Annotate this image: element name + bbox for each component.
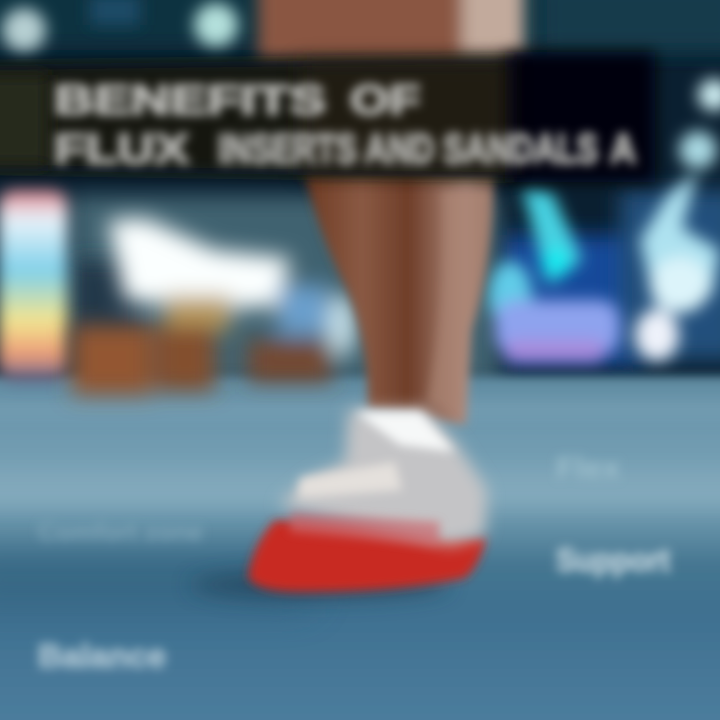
sandal	[248, 408, 487, 592]
floor label: lower left: Balance	[38, 638, 166, 674]
sandal shadow	[190, 571, 450, 599]
upper leg	[258, 0, 524, 60]
title band	[0, 52, 655, 182]
left rainbow panel	[0, 190, 68, 382]
lower leg	[305, 175, 494, 425]
title: benefits text: OF	[350, 76, 420, 123]
floor label: left: Comfort zone	[38, 516, 203, 546]
title: benefits text: FLUX	[54, 125, 189, 172]
background shapes: white blurred object	[72, 218, 357, 395]
title: benefits text: BENEFITS	[54, 76, 326, 123]
title: benefits text	[54, 76, 636, 172]
background shapes: blue neon right	[488, 170, 720, 362]
background: dark upper scene	[0, 0, 720, 400]
floor label: upper right: Flex	[556, 452, 620, 485]
top bokeh lights	[2, 0, 720, 169]
floor label: right: Support	[556, 542, 670, 578]
floor	[0, 376, 720, 720]
title: benefits text: A	[610, 125, 636, 172]
title: benefits text: INSERTS AND SANDALS	[218, 125, 598, 172]
